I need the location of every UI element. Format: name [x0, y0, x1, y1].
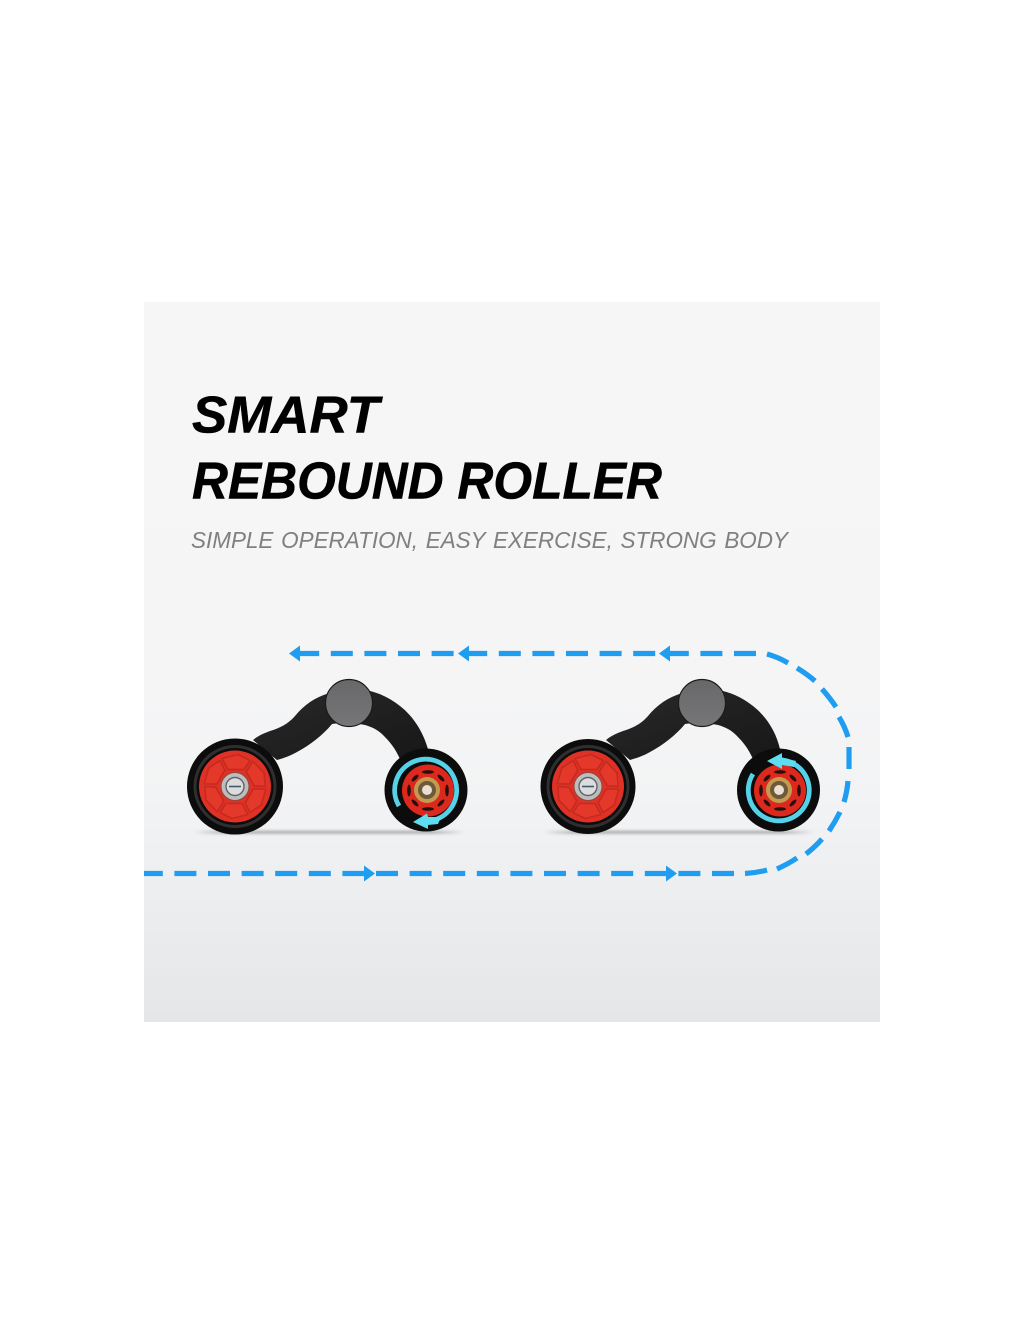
rotation arrow — [748, 760, 809, 821]
arrow head: top middle — [458, 646, 469, 662]
wheel: small with rotation arrow — [384, 748, 468, 832]
curved dashes — [745, 654, 849, 874]
arrow head: bottom right — [666, 866, 677, 882]
top straight dashes — [298, 651, 756, 656]
arrow head: top left — [289, 646, 300, 662]
title: SMART — [192, 386, 383, 444]
subtitle: SIMPLE OPERATION, EASY EXERCISE, STRONG BODY — [191, 527, 790, 553]
arrow head: top right — [659, 646, 670, 662]
ground shadow — [193, 830, 465, 834]
title — [192, 386, 662, 510]
bottom straight dashes — [144, 871, 734, 876]
arm — [606, 691, 780, 760]
panel: product background — [144, 302, 880, 1022]
wheel: small with rotation arrow — [737, 748, 820, 832]
wheel: large — [187, 738, 283, 834]
arm — [253, 691, 428, 760]
knob — [678, 680, 726, 726]
wheel: large — [540, 739, 636, 834]
knob — [326, 680, 372, 726]
title: REBOUND ROLLER — [192, 452, 662, 510]
ground shadow — [543, 830, 815, 834]
arrow head: bottom middle — [364, 866, 375, 882]
roller: left — [187, 680, 468, 834]
arrow: dashed motion path — [144, 646, 849, 882]
rotation arrow — [395, 759, 457, 820]
roller: right — [540, 680, 820, 834]
